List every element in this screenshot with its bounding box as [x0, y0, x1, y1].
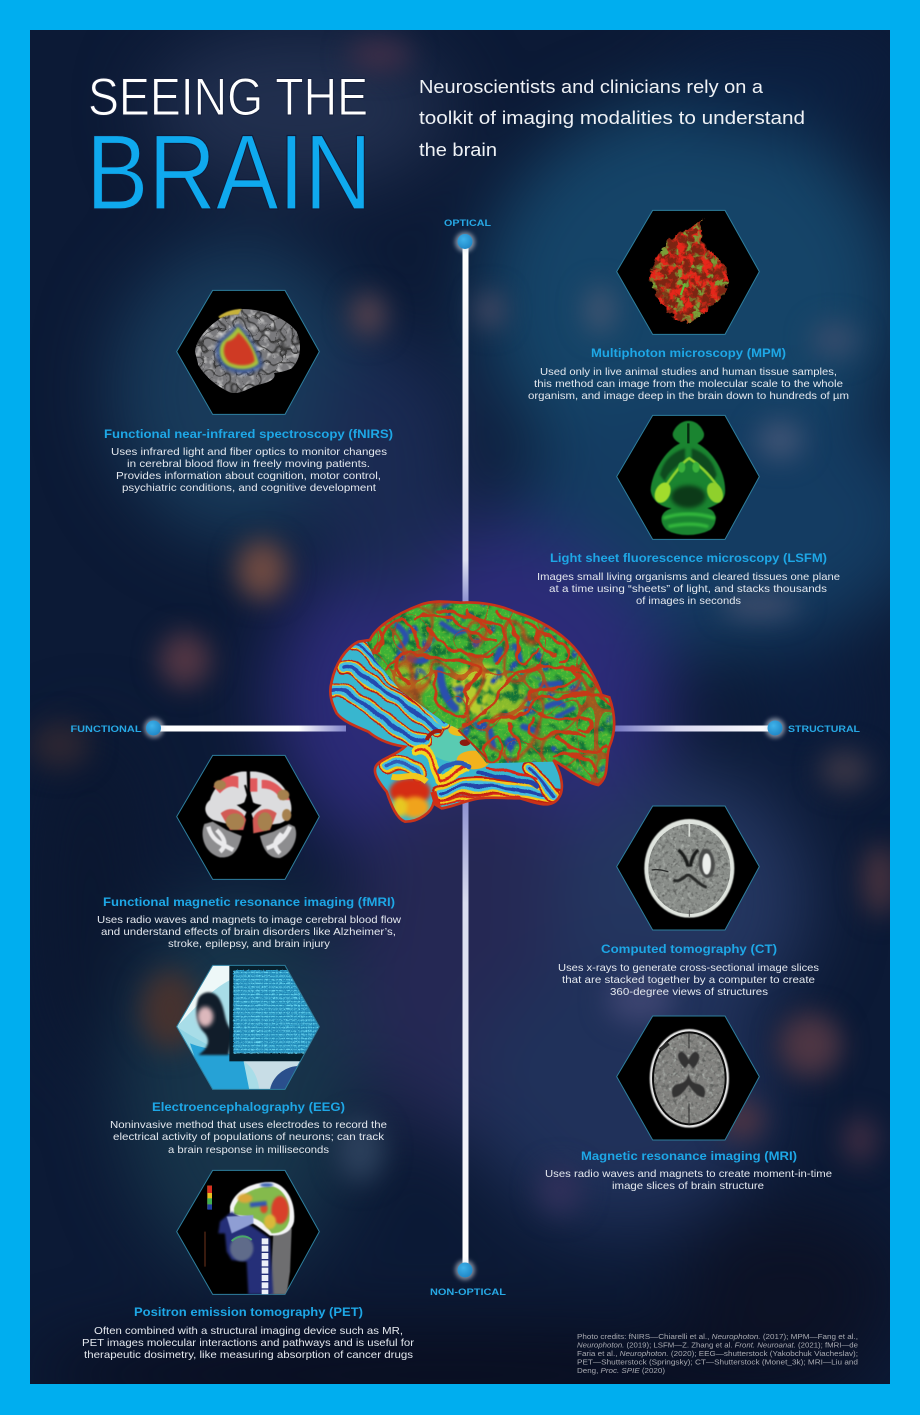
- panel: fMRI: [97, 755, 401, 950]
- body: [111, 446, 387, 494]
- panel: LSFM: [537, 415, 840, 607]
- body: Noninvasive method that uses electrodes to record the: [110, 1119, 387, 1131]
- photo credits: Faria et al., Neurophoton. (2020); EEG—shutterstock (Yakobchuk Viacheslav);: [577, 1349, 858, 1358]
- blue sulcal patches: [397, 623, 573, 747]
- intro text: Neuroscientists and clinicians rely on a: [419, 76, 764, 97]
- body: image slices of brain structure: [612, 1180, 764, 1192]
- heading: Functional near-infrared spectroscopy (fNIRS): [104, 429, 393, 441]
- intro text: toolkit of imaging modalities to understand: [419, 107, 805, 128]
- rainbow frontal and temporal bands: [332, 642, 561, 820]
- body: psychiatric conditions, and cognitive development: [122, 482, 376, 494]
- body: that are stacked together by a computer to create: [562, 974, 815, 986]
- intro text: the brain: [419, 139, 497, 160]
- body: of images in seconds: [636, 595, 741, 607]
- body: [558, 962, 819, 998]
- knob: structural: [765, 718, 785, 738]
- axis label: non-optical: NON-OPTICAL: [430, 1287, 506, 1298]
- panel: fNIRS: [104, 290, 393, 494]
- photo credits: Photo credits: fNIRS—Chiarelli et al., Neurophoton. (2017); MPM—Fang et al.,: [577, 1332, 858, 1341]
- body: Often combined with a structural imaging device such as MR,: [94, 1325, 403, 1337]
- body: in cerebral blood flow in freely moving patients.: [127, 458, 370, 470]
- body: Images small living organisms and cleared tissues one plane: [537, 571, 840, 583]
- body: [97, 914, 401, 950]
- knob: optical: [455, 232, 475, 252]
- body: [537, 571, 840, 607]
- panel: EEG: [110, 960, 387, 1156]
- body: [528, 366, 849, 402]
- axis label: structural: STRUCTURAL: [788, 724, 860, 735]
- knob: functional: [144, 718, 164, 738]
- panel: MRI: [545, 1016, 832, 1192]
- body: [82, 1325, 415, 1361]
- central brain illustration: [329, 600, 616, 823]
- body: Uses radio waves and magnets to image cerebral blood flow: [97, 914, 401, 926]
- icon: PET head scan hexagon: [177, 1170, 319, 1294]
- axis: horizontal left: [156, 726, 346, 732]
- photo credits: [577, 1332, 858, 1375]
- body: electrical activity of populations of neurons; can track: [113, 1131, 385, 1143]
- heading: Functional magnetic resonance imaging (fMRI): [103, 897, 395, 909]
- axis: vertical top: [462, 246, 468, 602]
- body: 360-degree views of structures: [610, 986, 768, 998]
- heading: Magnetic resonance imaging (MRI): [581, 1151, 797, 1163]
- body: Provides information about cognition, motor control,: [116, 470, 381, 482]
- axis label: functional: FUNCTIONAL: [70, 724, 142, 735]
- body: therapeutic dosimetry, like measuring absorption of cancer drugs: [84, 1349, 413, 1361]
- body: PET images molecular interactions and pathways and is useful for: [82, 1337, 415, 1349]
- panel: MPM: [528, 210, 849, 402]
- panel: CT: [558, 806, 819, 998]
- icon: fNIRS brain hexagon: [177, 290, 319, 414]
- heading: Positron emission tomography (PET): [134, 1307, 363, 1319]
- axis label: optical: OPTICAL: [444, 218, 491, 229]
- panel: PET: [82, 1170, 415, 1361]
- body: at a time using “sheets” of light, and stacks thousands: [549, 583, 827, 595]
- icon: EEG monitor and patient hexagon: [176, 964, 320, 1090]
- knob: non-optical: [455, 1260, 475, 1280]
- axis: vertical bottom: [462, 800, 468, 1270]
- icon: LSFM mouse brain hexagon: [617, 415, 759, 539]
- body: this method can image from the molecular scale to the whole: [534, 378, 843, 390]
- icon: MPM tissue hexagon: [617, 210, 759, 334]
- body: Uses radio waves and magnets to create moment-in-time: [545, 1168, 832, 1180]
- heading: Electroencephalography (EEG): [152, 1102, 345, 1114]
- photo credits: PET—Shutterstock (Springsky); CT—Shutterstock (Monet_3k); MRI—Liu and: [577, 1358, 858, 1366]
- heading: Light sheet fluorescence microscopy (LSFM): [550, 553, 827, 565]
- title line: seeing the: SEEING THE: [88, 68, 368, 127]
- red sulcal folds: [370, 610, 613, 770]
- body: [545, 1168, 832, 1192]
- icon: fMRI coronal slices hexagon: [177, 755, 319, 879]
- body: Uses infrared light and fiber optics to monitor changes: [111, 446, 387, 458]
- heading: Multiphoton microscopy (MPM): [591, 348, 786, 360]
- icon: CT axial slice hexagon: [617, 806, 759, 930]
- intro text: [419, 76, 805, 160]
- brain rim: [330, 602, 614, 822]
- heading: Computed tomography (CT): [601, 944, 777, 956]
- body: organism, and image deep in the brain down to hundreds of µm: [528, 390, 849, 402]
- body: Uses x-rays to generate cross-sectional image slices: [558, 962, 819, 974]
- body: and understand effects of brain disorders like Alzheimer’s,: [101, 926, 396, 938]
- icon: MRI axial slice hexagon: [617, 1016, 759, 1140]
- title: [86, 68, 372, 232]
- body: stroke, epilepsy, and brain injury: [168, 938, 331, 950]
- photo credits: Deng, Proc. SPIE (2020): [577, 1366, 665, 1375]
- body: [110, 1119, 387, 1156]
- body: a brain response in milliseconds: [168, 1144, 329, 1156]
- body: Used only in live animal studies and human tissue samples,: [540, 366, 837, 378]
- photo credits: Neurophoton. (2019); LSFM—Z. Zhang et al. Front. Neuroanat. (2021); fMRI—de: [577, 1340, 858, 1350]
- title line: brain: BRAIN: [86, 112, 372, 232]
- axis: horizontal right: [612, 726, 774, 732]
